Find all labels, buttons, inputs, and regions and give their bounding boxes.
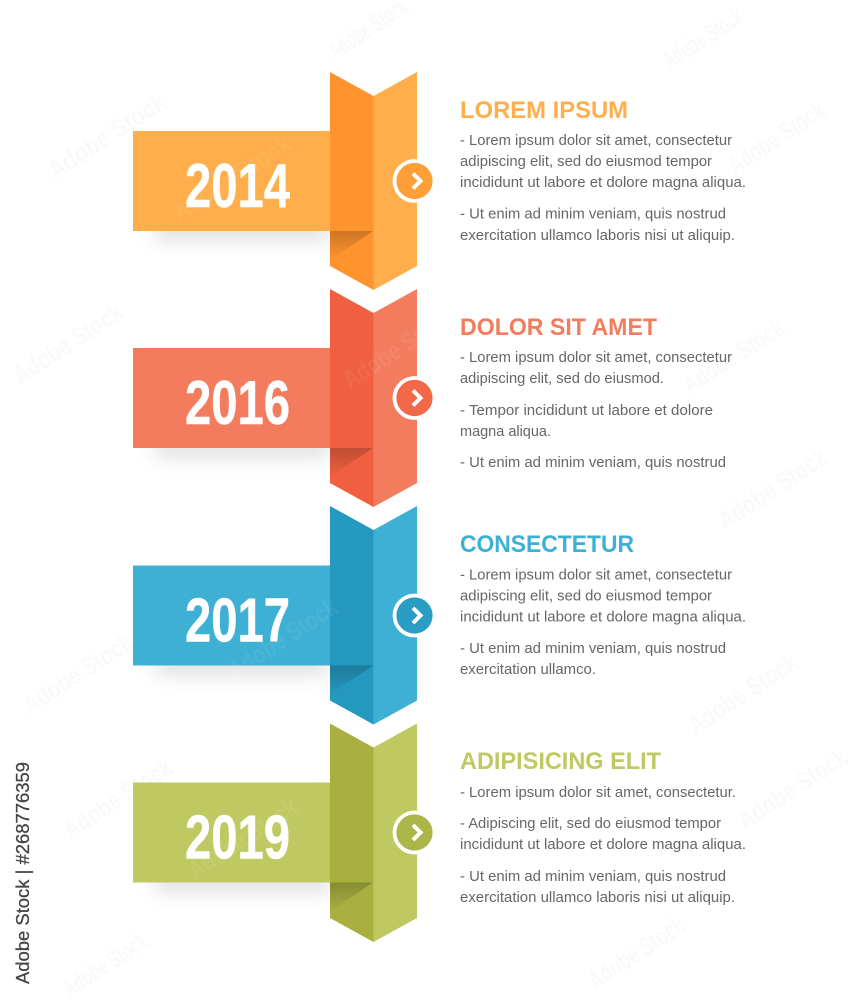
body: - Lorem ipsum dolor sit amet, consectetur xyxy=(460,350,732,366)
body: - Ut enim ad minim veniam, quis nostrud xyxy=(460,455,726,471)
body: - Tempor incididunt ut labore et dolore xyxy=(460,403,713,419)
fold shadow xyxy=(330,666,373,694)
watermark over shapes: Adobe Stock xyxy=(167,128,297,227)
body: - Lorem ipsum dolor sit amet, consectetur xyxy=(460,568,732,584)
watermark pattern: Adobe Stock xyxy=(17,627,138,720)
body xyxy=(460,568,746,678)
chevron xyxy=(330,724,417,942)
body: adipiscing elit, sed do eiusmod. xyxy=(460,371,664,387)
body xyxy=(460,785,746,906)
year label: 2016 xyxy=(185,369,290,438)
watermark pattern: Adobe Stock xyxy=(57,752,178,845)
band shadow xyxy=(155,435,330,457)
chevron xyxy=(330,506,417,724)
body: - Ut enim ad minim veniam, quis nostrud xyxy=(460,641,726,657)
year band xyxy=(133,566,330,666)
watermark pattern: Adobe Stock xyxy=(7,297,128,390)
watermark pattern: Adobe Stock xyxy=(582,910,691,995)
body: - Lorem ipsum dolor sit amet, consectetur xyxy=(460,133,732,149)
body: - Ut enim ad minim veniam, quis nostrud xyxy=(460,869,726,885)
icon: arrow circle xyxy=(394,161,434,201)
text block: 2017 xyxy=(460,531,746,678)
icon: arrow circle xyxy=(394,378,434,418)
year band xyxy=(133,131,330,231)
stock credit: Adobe Stock | #268776359 xyxy=(13,762,33,984)
band shadow xyxy=(155,870,330,892)
panel: 2016 xyxy=(133,289,434,507)
body: - Ut enim ad minim veniam, quis nostrud xyxy=(460,206,726,222)
body: exercitation ullamco laboris nisi ut aliquip. xyxy=(460,890,735,906)
watermark over shapes xyxy=(167,128,458,885)
heading: CONSECTETUR xyxy=(460,531,634,558)
body: - Adipiscing elit, sed do eiusmod tempor xyxy=(460,816,721,832)
fold shadow xyxy=(330,448,373,477)
watermark over shapes: Adobe Stock xyxy=(337,302,458,395)
icon: arrow circle xyxy=(394,596,434,636)
body: - Lorem ipsum dolor sit amet, consectetur. xyxy=(460,785,736,801)
body: exercitation ullamco laboris nisi ut aliquip. xyxy=(460,228,735,244)
watermark pattern: Adobe Stock xyxy=(677,312,790,400)
watermark pattern: Adobe Stock xyxy=(682,647,803,740)
heading: DOLOR SIT AMET xyxy=(460,314,657,341)
text block: 2016 xyxy=(460,314,732,471)
year label: 2019 xyxy=(185,804,290,872)
chevron xyxy=(330,289,417,507)
body: adipiscing elit, sed do eiusmod tempor xyxy=(460,154,712,170)
body xyxy=(460,133,746,244)
body xyxy=(460,350,732,471)
text block: 2014 xyxy=(460,97,746,244)
watermark over shapes: Adobe Stock xyxy=(222,592,343,685)
heading: LOREM IPSUM xyxy=(460,97,628,124)
year label: 2014 xyxy=(185,152,290,221)
body: incididunt ut labore et dolore magna aliqua. xyxy=(460,610,746,626)
text block: 2019 xyxy=(460,748,746,906)
chevron xyxy=(330,72,417,290)
panel: 2014 xyxy=(133,72,434,290)
year band xyxy=(133,348,330,448)
body: magna aliqua. xyxy=(460,424,551,440)
body: adipiscing elit, sed do eiusmod tempor xyxy=(460,588,712,604)
band shadow xyxy=(155,218,330,240)
heading: ADIPISICING ELIT xyxy=(460,748,661,775)
year label: 2017 xyxy=(185,586,290,656)
fold shadow xyxy=(330,882,373,912)
panel: 2017 xyxy=(133,506,434,724)
icon: arrow circle xyxy=(394,812,434,852)
year band xyxy=(133,782,330,882)
body: incididunt ut labore et dolore magna aliqua. xyxy=(460,837,746,853)
panel: 2019 xyxy=(133,724,434,942)
body: incididunt ut labore et dolore magna aliqua. xyxy=(460,175,746,191)
watermark pattern: Adobe Stock xyxy=(712,442,833,535)
fold shadow xyxy=(330,231,373,260)
watermark over shapes: Adobe Stock xyxy=(182,792,303,885)
watermark pattern: Adobe Stock xyxy=(42,86,172,185)
body: exercitation ullamco. xyxy=(460,662,596,678)
band shadow xyxy=(155,652,330,674)
watermark pattern: Adobe Stock xyxy=(57,926,153,1000)
